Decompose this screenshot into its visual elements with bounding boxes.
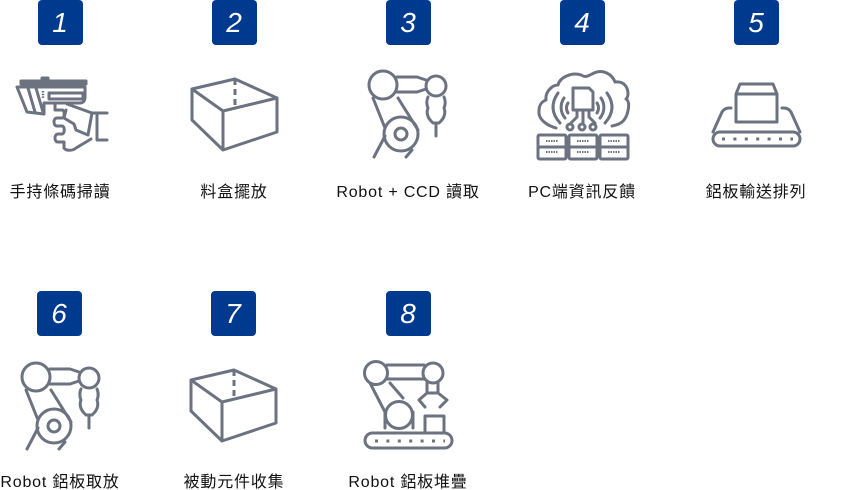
badge 7: 7 bbox=[225, 298, 242, 329]
badge 2 bbox=[212, 0, 257, 45]
icon: robot arm with camera bbox=[369, 71, 446, 157]
badge 1: 1 bbox=[52, 7, 68, 38]
icon: open component box bbox=[191, 370, 276, 441]
icon: PCB conveyor with box bbox=[713, 84, 800, 146]
badge 6 bbox=[37, 291, 82, 336]
label 1: 手持條碼掃讀 bbox=[10, 182, 110, 201]
badge 4 bbox=[560, 0, 605, 45]
badge 2: 2 bbox=[225, 7, 242, 38]
icon: cloud data and server racks bbox=[538, 72, 629, 159]
badge 6: 6 bbox=[51, 298, 67, 329]
icon: open material box bbox=[192, 79, 277, 150]
badge 5: 5 bbox=[748, 7, 764, 38]
badge 3: 3 bbox=[400, 7, 416, 38]
badge 5 bbox=[734, 0, 779, 45]
label 3: Robot + CCD 讀取 bbox=[336, 183, 480, 201]
label 4: PC端資訊反饋 bbox=[528, 183, 636, 201]
badge 7 bbox=[211, 291, 256, 336]
badge 3 bbox=[386, 0, 431, 45]
icon: handheld barcode scanner bbox=[17, 78, 107, 150]
badge 4: 4 bbox=[574, 7, 590, 38]
icon: robot arm stacking on conveyor bbox=[364, 362, 452, 448]
badge 8 bbox=[386, 291, 431, 336]
label 2: 料盒擺放 bbox=[200, 183, 268, 201]
icon: robot arm placing board bbox=[22, 363, 99, 449]
badge 8: 8 bbox=[400, 298, 416, 329]
label 5: 鋁板輸送排列 bbox=[706, 183, 806, 201]
badge 1 bbox=[38, 0, 83, 45]
